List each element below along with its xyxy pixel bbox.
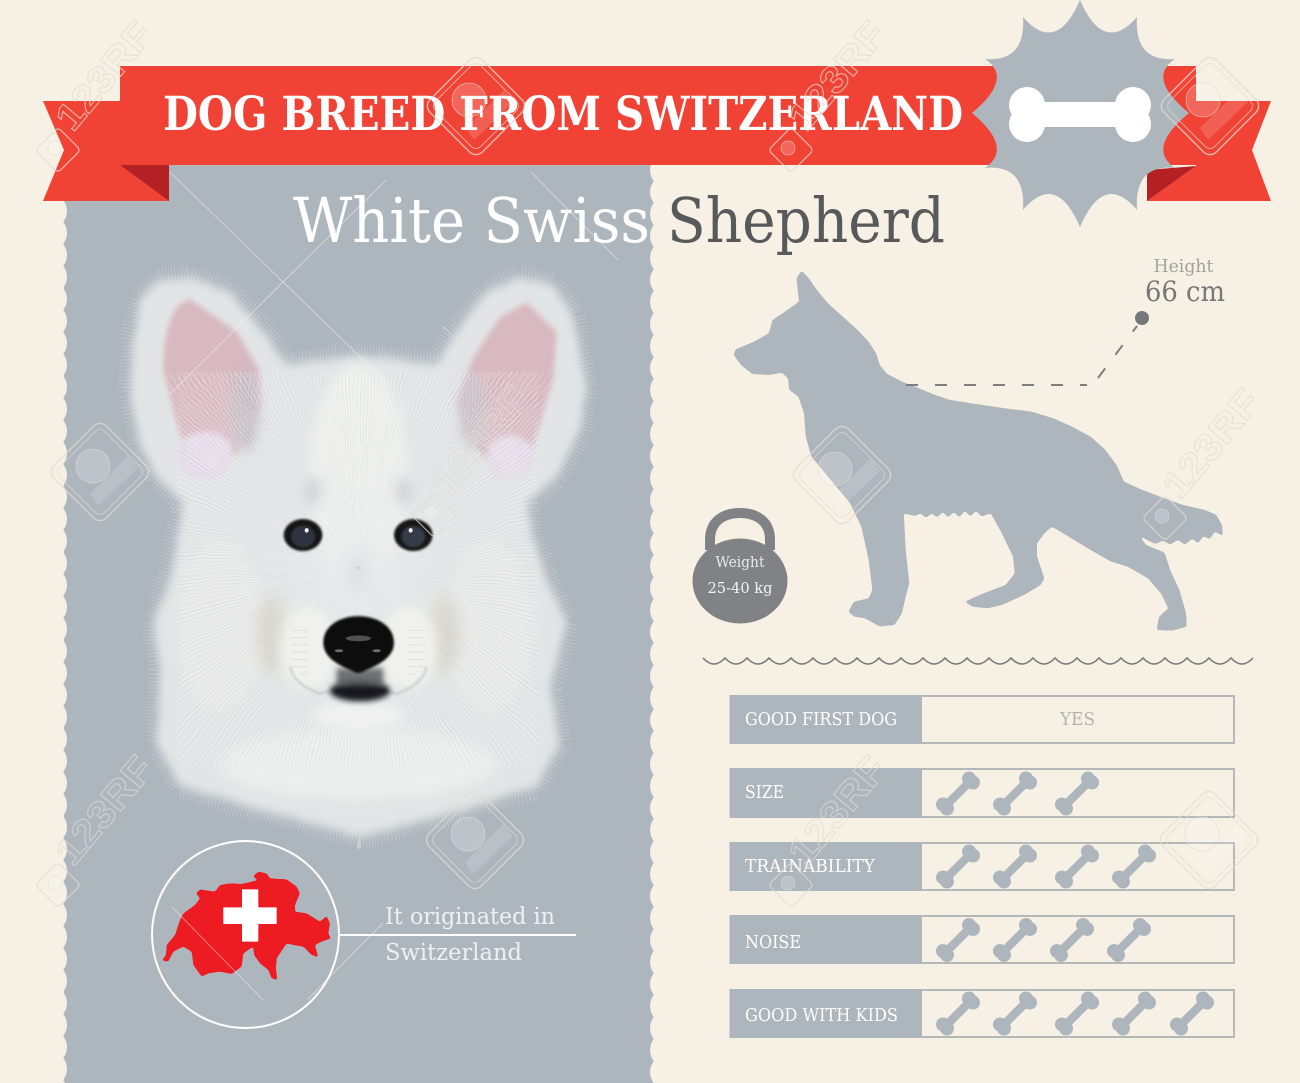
- portrait: ear hairs: [164, 372, 554, 477]
- weight kettlebell: [692, 513, 788, 624]
- stock watermark overlay: 123RF: [48, 749, 162, 874]
- portrait: right inner ear: [457, 303, 557, 479]
- title part on panel: White Swiss: [293, 184, 650, 257]
- country map emblem: [152, 841, 576, 1028]
- panel: grey portrait panel with scalloped edges: [49, 165, 668, 1083]
- origin text: [385, 904, 555, 966]
- dog silhouette: [734, 271, 1223, 631]
- row: good first dog: GOOD FIRST DOG: [745, 709, 897, 730]
- ribbon left fold: [120, 165, 169, 201]
- kettlebell body: [692, 538, 788, 624]
- ribbon main bar: [120, 66, 1196, 165]
- badge with bone icon: [972, 0, 1189, 227]
- portrait: left inner ear: [163, 299, 260, 479]
- stock watermark overlay: 123RF: [781, 14, 895, 139]
- emblem circle: [152, 841, 339, 1028]
- row: good with kids: GOOD WITH KIDS: [745, 1005, 898, 1026]
- portrait: right eye: [394, 519, 433, 551]
- portrait: left eye: [284, 519, 322, 551]
- portrait: nose and mouth: [323, 616, 394, 701]
- stock watermark overlay: 123RF: [48, 14, 162, 139]
- origin text: Switzerland: [385, 940, 522, 966]
- title part on cream: Shepherd: [667, 184, 945, 257]
- map of Switzerland: [162, 872, 331, 980]
- row: noise: [730, 915, 1234, 964]
- ribbon right fold: [1147, 166, 1196, 201]
- portrait: shaded areas of fur: [177, 365, 533, 801]
- stock watermark overlay: 123RF: [1155, 382, 1269, 507]
- weight label: Weight: [716, 555, 765, 571]
- height callout: [906, 256, 1225, 385]
- rating table: [730, 695, 1234, 1038]
- ribbon banner: [43, 66, 1271, 201]
- portrait: radial fur strands: [208, 405, 508, 732]
- row: size: [730, 768, 1234, 818]
- ribbon left tail: [43, 101, 169, 201]
- row: trainability: [730, 842, 1234, 891]
- ribbon right tail: [1147, 101, 1271, 201]
- row: size: SIZE: [745, 782, 784, 803]
- icon: white cross: [223, 889, 277, 942]
- origin text: It originated in: [385, 904, 555, 930]
- dog portrait illustration: [130, 277, 587, 837]
- row: noise: NOISE: [745, 932, 801, 953]
- icon: white bone: [1009, 87, 1151, 142]
- portrait: head and ruff silhouette: [130, 277, 587, 837]
- height value: 66 cm: [1145, 275, 1225, 308]
- weight value: 25-40 kg: [708, 579, 773, 597]
- badge starburst: [972, 0, 1189, 227]
- stock watermark overlay: 123RF: [424, 379, 538, 504]
- wave divider: [703, 658, 1253, 664]
- banner heading: DOG BREED FROM SWITZERLAND: [163, 87, 963, 142]
- row: trainability: TRAINABILITY: [745, 856, 876, 877]
- leader line: [339, 934, 576, 936]
- height marker dot: [1135, 311, 1149, 325]
- title: [293, 184, 945, 257]
- kettlebell handle: [710, 513, 770, 550]
- portrait: outer fur fringe: [130, 277, 587, 837]
- height dashed leader: [906, 326, 1137, 385]
- height label: Height: [1154, 256, 1214, 277]
- row: good with kids: [730, 989, 1234, 1038]
- row: good first dog: [730, 695, 1234, 744]
- portrait: muzzle: [280, 606, 437, 730]
- row: good first dog: YES: [1059, 709, 1095, 730]
- stock watermark overlay: 123RF: [781, 749, 895, 874]
